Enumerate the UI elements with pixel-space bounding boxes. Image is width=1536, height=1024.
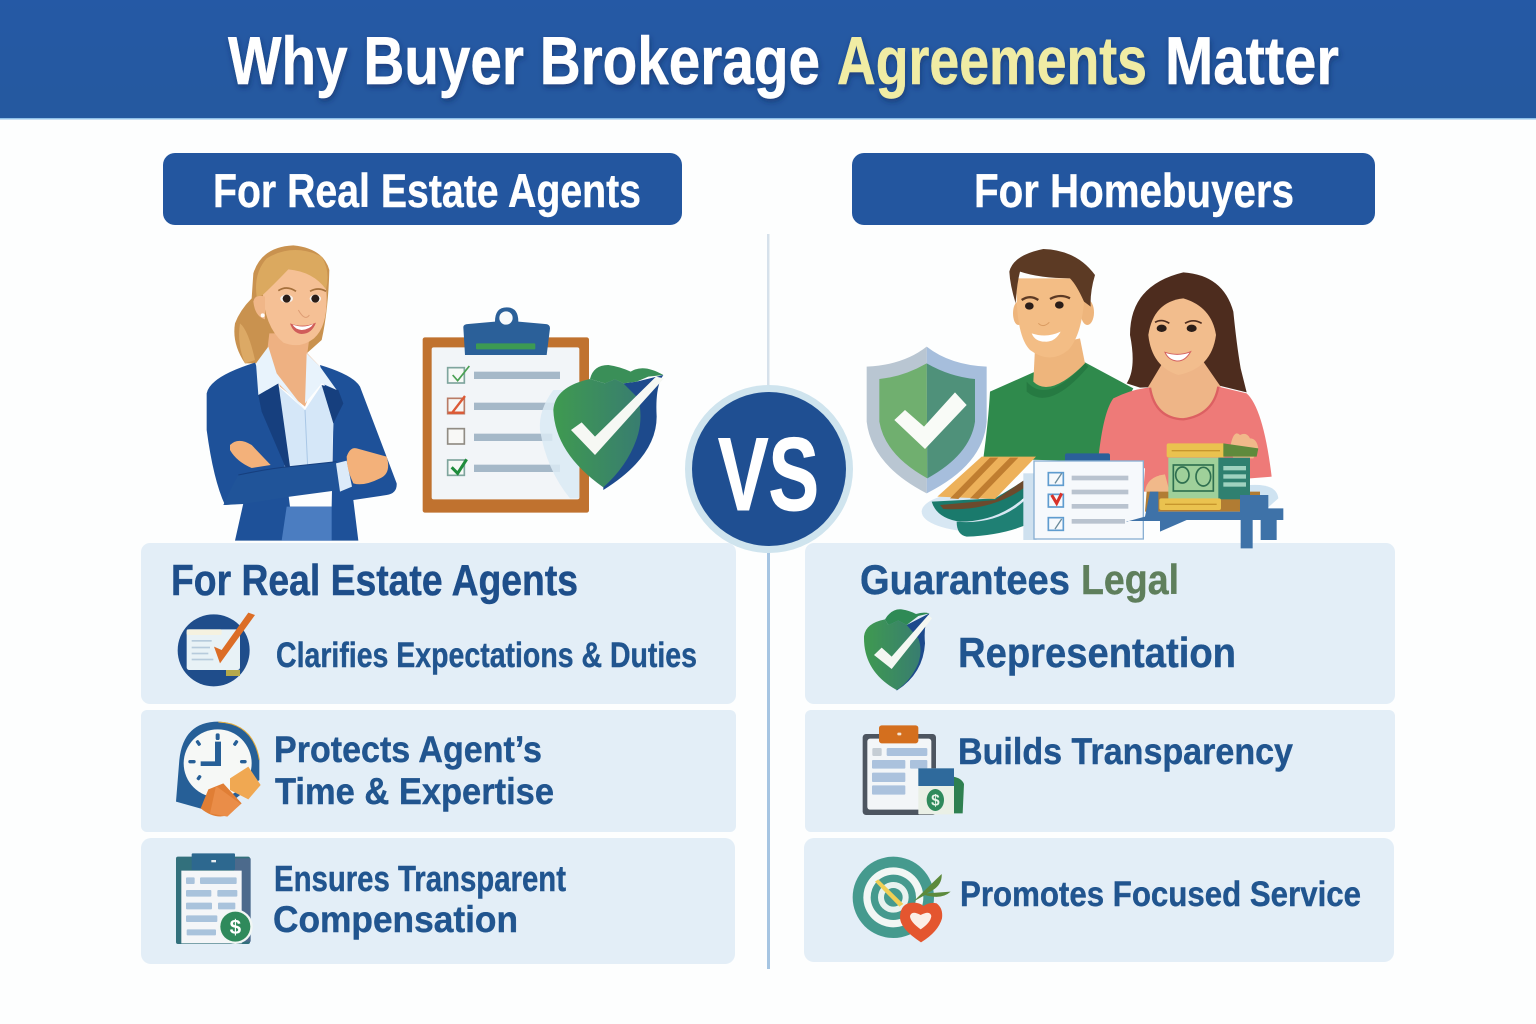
icon: clipboard with money (863, 725, 964, 815)
lapels (258, 383, 290, 470)
column header: For Homebuyers (852, 153, 1375, 225)
panel: agents card 1 (141, 543, 736, 704)
jacket (207, 363, 397, 541)
header banner (0, 0, 1536, 120)
label: Protects Agent's Time & Expertise (274, 729, 554, 812)
column header: For Real Estate Agents (163, 153, 682, 225)
panel: buyers card 3 (804, 838, 1394, 962)
checklist document (1023, 453, 1143, 540)
title (228, 23, 1339, 99)
icon: invoice with dollar: $ (230, 916, 242, 939)
money and books on blue stand (1127, 443, 1283, 548)
label: Ensures Transparent Compensation: Compensation (273, 899, 518, 940)
label: Builds Transparency: Builds Transparency (958, 731, 1293, 772)
panel heading: For Real Estate Agents: For Real Estate Agents (171, 556, 578, 605)
label: Promotes Focused Service: Promotes Focused Service (960, 875, 1361, 914)
column header: For Real Estate Agents: For Real Estate Agents (213, 164, 641, 217)
title: Matter (1165, 23, 1339, 99)
label: Ensures Transparent Compensation (273, 858, 566, 940)
illustration: clipboard checklist with shield (423, 307, 664, 513)
label: Clarifies Expectations & Duties: Clarifies Expectations & Duties (276, 636, 697, 675)
panel: buyers card 2 (805, 710, 1395, 832)
panel: agents card 2 (141, 710, 736, 832)
panel: agents card 3 (141, 838, 735, 964)
VS badge (685, 385, 853, 553)
wooden model (922, 457, 1036, 537)
neck (267, 333, 320, 407)
icon: target with heart (853, 857, 951, 942)
blue stand (1127, 492, 1283, 548)
face (263, 263, 327, 345)
title: Why Buyer Brokerage (228, 23, 820, 99)
label: Representation: Representation (958, 629, 1236, 676)
label: Ensures Transparent Compensation: Ensures Transparent (274, 858, 566, 899)
man (983, 249, 1133, 462)
icon: document with check (178, 613, 255, 686)
icon: green shield (864, 609, 932, 691)
checklist rows (448, 366, 469, 475)
illustration: homebuyer couple (867, 249, 1283, 548)
shield with check (867, 347, 987, 493)
icon: invoice with dollar (176, 853, 253, 944)
clip (463, 307, 550, 355)
collar (256, 347, 305, 410)
left hand (230, 441, 271, 468)
VS badge: VS (718, 417, 819, 533)
shield (603, 375, 663, 490)
forearm (223, 462, 352, 505)
title: Agreements (837, 23, 1147, 99)
right hand (347, 448, 388, 484)
column header: For Homebuyers: For Homebuyers (974, 164, 1294, 217)
panel: buyers card 1 (805, 543, 1395, 704)
label: Protects Agent's Time & Expertise: Time & Expertise (275, 771, 554, 812)
cuff (336, 461, 352, 492)
icon: clipboard with money: $ (931, 793, 940, 810)
woman (1098, 272, 1272, 493)
illustration: agent woman with arms crossed (207, 245, 397, 541)
shirt (277, 385, 333, 467)
panel heading: Guarantees Legal: Guarantees (860, 556, 1070, 603)
icon: clock and handshake (176, 722, 261, 817)
label: Protects Agent's Time & Expertise: Protects Agent’s (274, 729, 542, 770)
hair back and ponytail (234, 245, 329, 363)
panel heading: Guarantees Legal: Legal (1081, 556, 1179, 603)
